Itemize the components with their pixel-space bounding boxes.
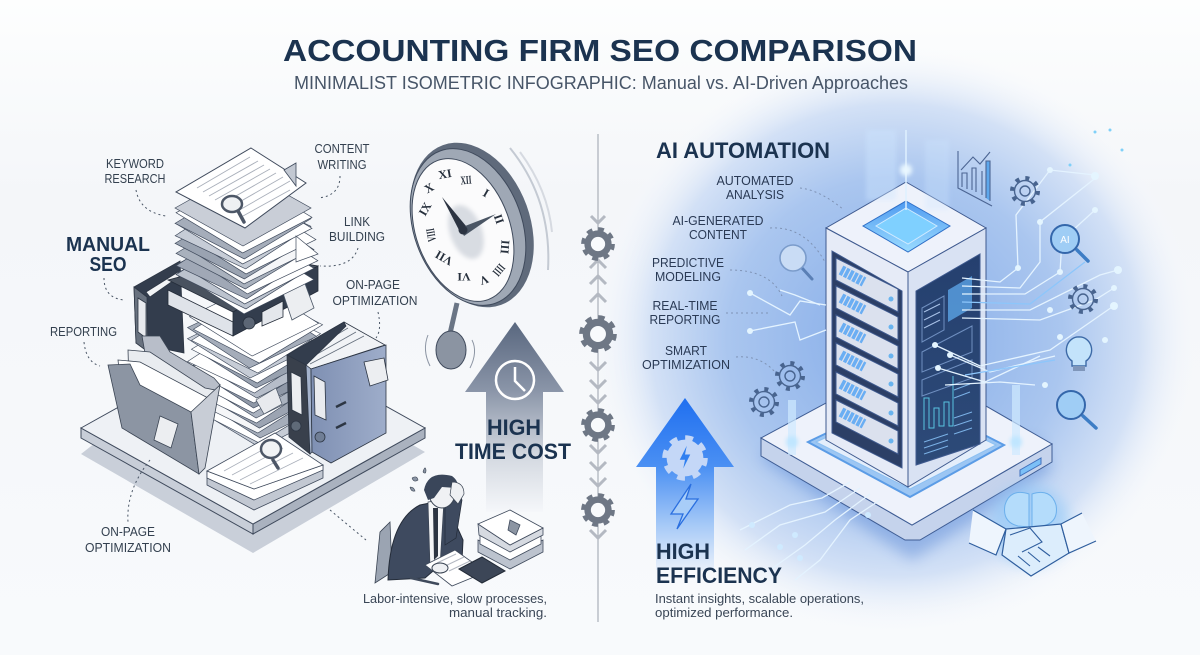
caption: manual <box>363 592 547 620</box>
heading: manual SEO <box>66 234 150 276</box>
brain <box>1005 492 1056 527</box>
icon: divider gear 2 <box>583 319 613 349</box>
label: keyword research <box>104 156 166 186</box>
light beams <box>786 130 1022 455</box>
caption: AI: Instant insights, scalable operations, <box>655 592 864 606</box>
icon: gear left upper <box>777 363 803 389</box>
clock numerals: XI <box>437 166 453 182</box>
label: on-page optimization: ON-PAGE <box>346 277 400 292</box>
clock numerals: VII <box>432 247 455 269</box>
label: keyword research: KEYWORD <box>106 156 164 171</box>
label: link building: LINK <box>344 214 370 229</box>
arrow: high time cost <box>455 322 572 512</box>
label: smart optimization <box>642 344 730 372</box>
label: AI-generated content <box>672 214 764 242</box>
sticky note on folder <box>154 416 178 448</box>
icon: divider gear 1 <box>584 230 612 258</box>
server base platform <box>740 360 1052 580</box>
label: high time cost: TIME COST <box>455 439 572 464</box>
clock numerals: VIII <box>423 227 439 243</box>
sticky note on lower stack <box>256 388 282 414</box>
clock <box>388 125 556 369</box>
label: on-page optimization lower <box>85 524 171 555</box>
clock numerals: VI <box>457 270 471 284</box>
label: link building <box>329 214 385 244</box>
label: smart optimization: OPTIMIZATION <box>642 358 730 372</box>
blue glow backdrop <box>590 45 1200 635</box>
clock numerals <box>416 166 513 288</box>
label: content writing: CONTENT <box>314 141 370 156</box>
label: real-time reporting <box>650 299 720 327</box>
icon: gear left lower <box>751 389 777 415</box>
label: high efficiency <box>656 539 782 588</box>
label: real-time reporting: REAL-TIME <box>652 299 718 313</box>
label: on-page optimization: OPTIMIZATION <box>332 293 418 308</box>
label: real-time reporting: REPORTING <box>650 313 720 327</box>
clock numerals: II <box>491 212 507 226</box>
subtitle: MINIMALIST ISOMETRIC INFOGRAPHIC: Manual vs. AI-Driven Approaches <box>294 73 908 93</box>
caption: AI: optimized performance. <box>655 606 793 620</box>
caption: manual: Labor-intensive, slow processes, <box>363 592 547 606</box>
clock numerals: IX <box>416 199 435 218</box>
label: link building: BUILDING <box>329 229 385 244</box>
handshake <box>1002 524 1069 576</box>
label: AI-generated content: AI-GENERATED <box>672 214 764 228</box>
pendulum <box>425 303 475 369</box>
overwhelmed accountant <box>375 468 543 586</box>
label: AI-generated content: CONTENT <box>689 228 747 242</box>
clock numerals: X <box>422 180 437 196</box>
top light cap <box>863 201 950 252</box>
clock numerals: III <box>497 239 513 255</box>
blue and dark binders <box>287 322 388 463</box>
server tower <box>826 182 986 487</box>
icon: magnifier AI <box>1051 225 1088 261</box>
icon: lightning bolt <box>671 484 698 529</box>
icon: light bulb <box>1066 337 1092 371</box>
screen panel <box>916 254 980 465</box>
desk illustration <box>81 332 425 553</box>
upright dark binder <box>134 261 184 353</box>
clock numerals: V <box>477 272 490 288</box>
label: predictive modeling: PREDICTIVE <box>652 256 724 270</box>
title: ACCOUNTING FIRM SEO COMPARISON <box>283 33 917 68</box>
icon: gear with bolt <box>667 440 703 476</box>
label: predictive modeling: MODELING <box>655 270 721 284</box>
icon: magnifier on stack <box>222 196 244 222</box>
panel: manual SEO <box>50 125 572 620</box>
icon: small clock in arrow <box>496 361 534 399</box>
small papers on accountant desk <box>478 510 543 569</box>
label: content writing: WRITING <box>318 157 366 172</box>
icon: divider gear 4 <box>584 496 612 524</box>
label: on-page optimization lower: OPTIMIZATION <box>85 540 171 555</box>
label: on-page optimization <box>332 277 418 308</box>
label: keyword research: RESEARCH <box>104 171 166 186</box>
label: high time cost <box>455 415 572 464</box>
clock numerals: XII <box>460 173 472 187</box>
label: high time cost: HIGH <box>487 415 541 440</box>
icon: gear top right <box>1012 178 1038 204</box>
panel: AI automation <box>636 128 1124 620</box>
clock numerals: IIII <box>490 261 508 279</box>
folder <box>108 336 220 474</box>
clock numerals: I <box>480 186 492 200</box>
icon: magnifier lower <box>1057 391 1096 428</box>
lying dark binder <box>168 256 318 336</box>
circuit traces <box>747 128 1124 388</box>
label: on-page optimization lower: ON-PAGE <box>101 524 155 539</box>
icon: gear right <box>1070 286 1096 312</box>
small paper stack with magnifier <box>207 433 323 510</box>
label: predictive modeling <box>652 256 724 284</box>
divider with gears and arrows <box>583 134 613 622</box>
heading: AI automation: AI AUTOMATION <box>656 138 830 163</box>
icon: bar chart <box>958 151 992 206</box>
label: automated analysis: ANALYSIS <box>726 188 784 202</box>
label: reporting: REPORTING <box>50 324 117 339</box>
label: automated analysis: AUTOMATED <box>716 174 794 188</box>
icon: brain and handshake <box>969 485 1096 576</box>
arrow: high efficiency <box>636 398 782 588</box>
label: automated analysis <box>716 174 794 202</box>
label: content writing <box>314 141 370 172</box>
caption: manual: manual tracking. <box>449 606 547 620</box>
icon: divider gear 3 <box>584 411 612 439</box>
label: smart optimization: SMART <box>665 344 707 358</box>
top sheet with text lines <box>176 148 306 228</box>
heading: manual SEO: MANUAL <box>66 234 150 256</box>
label: high efficiency: EFFICIENCY <box>656 563 782 588</box>
heading: manual SEO: SEO <box>90 254 126 276</box>
caption: AI <box>655 592 864 620</box>
icon: magnifier left <box>780 245 812 279</box>
icon: magnifier AI: AI <box>1060 235 1070 246</box>
stack of papers: upper <box>173 148 320 318</box>
stack of papers: lower <box>185 281 328 450</box>
rack panel with server units <box>832 251 902 468</box>
label: high efficiency: HIGH <box>656 539 710 564</box>
